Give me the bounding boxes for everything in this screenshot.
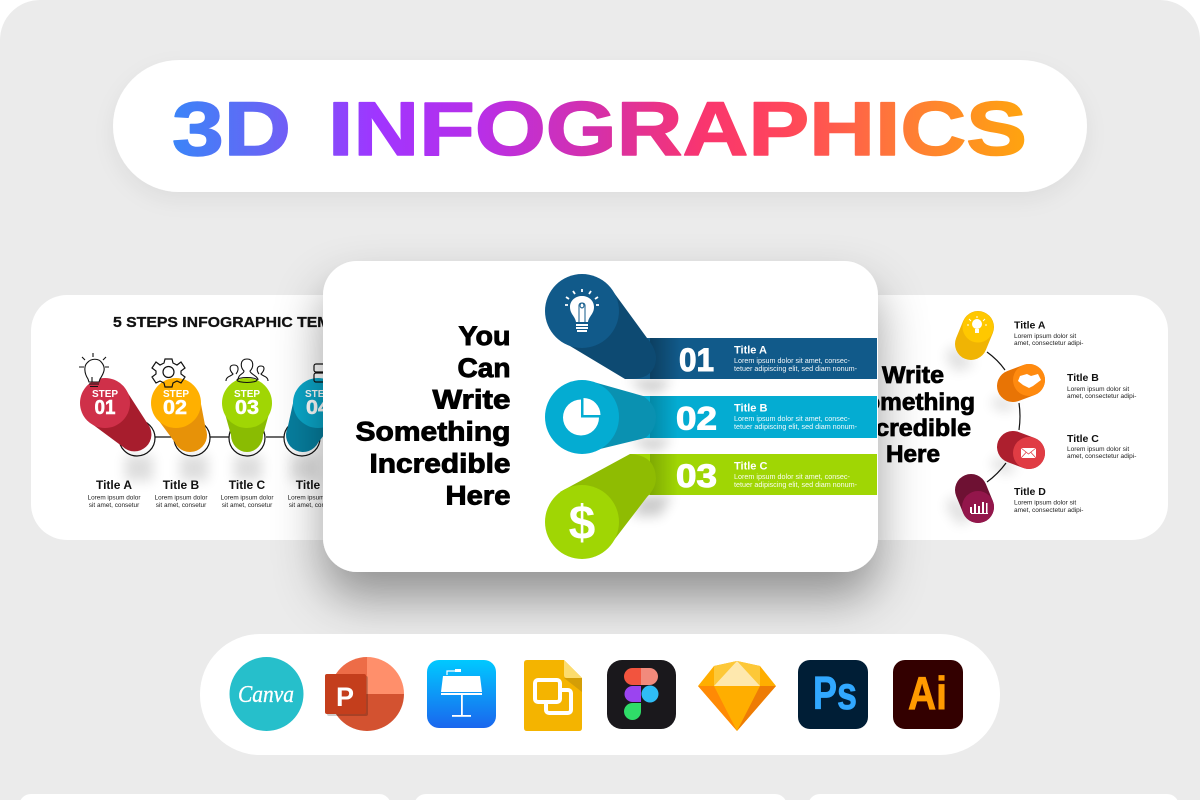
right labels: amet, consectetur adipi-	[1067, 453, 1136, 460]
icon: PowerPoint	[325, 657, 404, 731]
cylinder 01	[545, 274, 656, 379]
icon: outline bulb	[79, 353, 109, 386]
step 1 cylinder	[80, 378, 151, 451]
cylinder shadows	[945, 345, 1018, 525]
step 3 cylinder: STEP	[234, 389, 260, 400]
step 4 cylinder	[286, 378, 343, 452]
cylinder D	[962, 490, 994, 523]
right card headline: Here	[886, 441, 940, 468]
icon: envelope	[1021, 448, 1036, 458]
step labels: Lorem ipsum dolor	[88, 494, 141, 502]
cylinder B	[1013, 364, 1045, 396]
right card headline: Write	[882, 362, 944, 389]
cylinder 03	[545, 454, 656, 559]
cylinder 02	[545, 380, 656, 454]
icon: Canva: Canva	[238, 682, 294, 708]
center headline: Write	[432, 384, 510, 414]
panel: left 5 steps card	[31, 295, 451, 540]
step 3 cylinder	[222, 378, 272, 452]
center headline: You	[458, 321, 510, 351]
right labels: amet, consectetur adipi-	[1067, 393, 1136, 400]
step labels: sit amet, consetur	[289, 502, 340, 509]
icon: light bulb	[565, 289, 599, 331]
step labels: Title A	[96, 478, 132, 492]
bar numbers: 03	[676, 458, 717, 494]
drop shadows under cylinders	[628, 379, 672, 516]
step labels: sit amet, consetur	[89, 502, 140, 509]
bar copy	[734, 344, 858, 489]
right labels: Title C	[1067, 433, 1099, 445]
right labels: Lorem ipsum dolor sit	[1067, 386, 1129, 393]
bar copy: Lorem ipsum dolor sit amet, consec-	[734, 472, 850, 481]
icon: outline box	[314, 364, 330, 382]
cylinder shadows	[125, 455, 318, 481]
right card headline: Incredible	[853, 415, 971, 442]
icon: bar chart	[970, 502, 988, 514]
bar inner shading	[650, 338, 680, 495]
icon: Canva	[230, 657, 304, 731]
title pill	[113, 60, 1087, 192]
step labels	[88, 478, 341, 509]
icon: outline people	[226, 359, 268, 382]
icon: Photoshop	[798, 660, 868, 729]
icon: Figma	[607, 660, 676, 729]
right labels: Lorem ipsum dolor sit	[1067, 446, 1129, 453]
right labels: Title B	[1067, 372, 1099, 384]
icon: Sketch	[698, 661, 776, 731]
center headline: Here	[446, 480, 510, 510]
icon: Photoshop: Ps	[813, 667, 857, 719]
bars	[630, 338, 877, 379]
step 4 cylinder: STEP	[305, 389, 331, 400]
right labels	[1014, 320, 1136, 514]
title	[172, 87, 1027, 172]
bar copy: Title A	[734, 344, 767, 356]
bar copy: tetuer adipiscing elit, sed diam nonum-	[734, 480, 858, 489]
step 2 cylinder: 02	[163, 397, 187, 419]
bar copy: Lorem ipsum dolor sit amet, consec-	[734, 414, 850, 423]
icon: outline gear	[152, 359, 185, 387]
step labels: Title B	[163, 478, 200, 492]
step 2 cylinder	[151, 378, 207, 452]
center headline: Can	[458, 353, 510, 383]
icon: Illustrator	[893, 660, 963, 729]
right labels: amet, consectetur adipi-	[1014, 507, 1083, 514]
timeline rings and connector	[119, 420, 320, 456]
step 4 cylinder: 04	[306, 397, 331, 419]
icon: handshake	[1018, 374, 1041, 388]
bar copy: Title C	[734, 460, 767, 472]
center headline	[356, 321, 510, 510]
right labels: Lorem ipsum dolor sit	[1014, 333, 1076, 340]
cylinder A	[962, 312, 994, 344]
icon: pie chart	[563, 398, 600, 436]
step labels: Lorem ipsum dolor	[221, 494, 274, 502]
bar numbers	[676, 342, 717, 494]
cylinder C	[1013, 437, 1045, 469]
arc connector	[987, 352, 1020, 482]
center headline: Incredible	[370, 448, 510, 478]
panel: right circular card	[750, 295, 1168, 540]
bar numbers: 01	[679, 342, 714, 378]
bar copy: Lorem ipsum dolor sit amet, consec-	[734, 356, 850, 365]
right labels: Lorem ipsum dolor sit	[1014, 500, 1076, 506]
step labels: Lorem ipsum dolor	[288, 494, 341, 502]
step 1 cylinder: 01	[94, 397, 116, 419]
right card headline: Something	[849, 389, 975, 416]
step labels: Title D	[296, 478, 333, 492]
title: INFOGRAPHICS	[328, 87, 1027, 172]
right labels: Title D	[1014, 486, 1046, 498]
step labels: sit amet, consetur	[156, 502, 207, 509]
icon: PowerPoint: P	[336, 682, 354, 712]
bar numbers: 02	[676, 400, 717, 436]
step 2 cylinder: STEP	[163, 389, 189, 400]
step labels: Title C	[229, 478, 266, 492]
step labels: sit amet, consetur	[222, 502, 273, 509]
title: 3D	[172, 87, 291, 172]
bottom card previews	[19, 794, 1179, 800]
icon: Google Slides	[524, 660, 582, 731]
icon: Keynote	[427, 660, 496, 728]
icon: dollar: $	[569, 497, 596, 550]
step 3 cylinder: 03	[235, 397, 259, 419]
right card headline	[849, 362, 975, 468]
panel: software tools pill	[200, 634, 1000, 755]
center headline: Something	[356, 416, 510, 446]
bar copy: tetuer adipiscing elit, sed diam nonum-	[734, 422, 858, 431]
right labels: Title A	[1014, 320, 1046, 332]
panel: center card	[323, 261, 878, 572]
icon: Illustrator: Ai	[908, 667, 947, 719]
bar copy: Title B	[734, 402, 767, 414]
right labels: amet, consectetur adipi-	[1014, 340, 1083, 347]
left card heading: 5 STEPS INFOGRAPHIC TEMPLATE	[113, 314, 381, 331]
step labels: Lorem ipsum dolor	[155, 494, 208, 502]
step 1 cylinder: STEP	[92, 389, 118, 400]
icon: bulb	[967, 316, 987, 333]
bar copy: tetuer adipiscing elit, sed diam nonum-	[734, 364, 858, 373]
